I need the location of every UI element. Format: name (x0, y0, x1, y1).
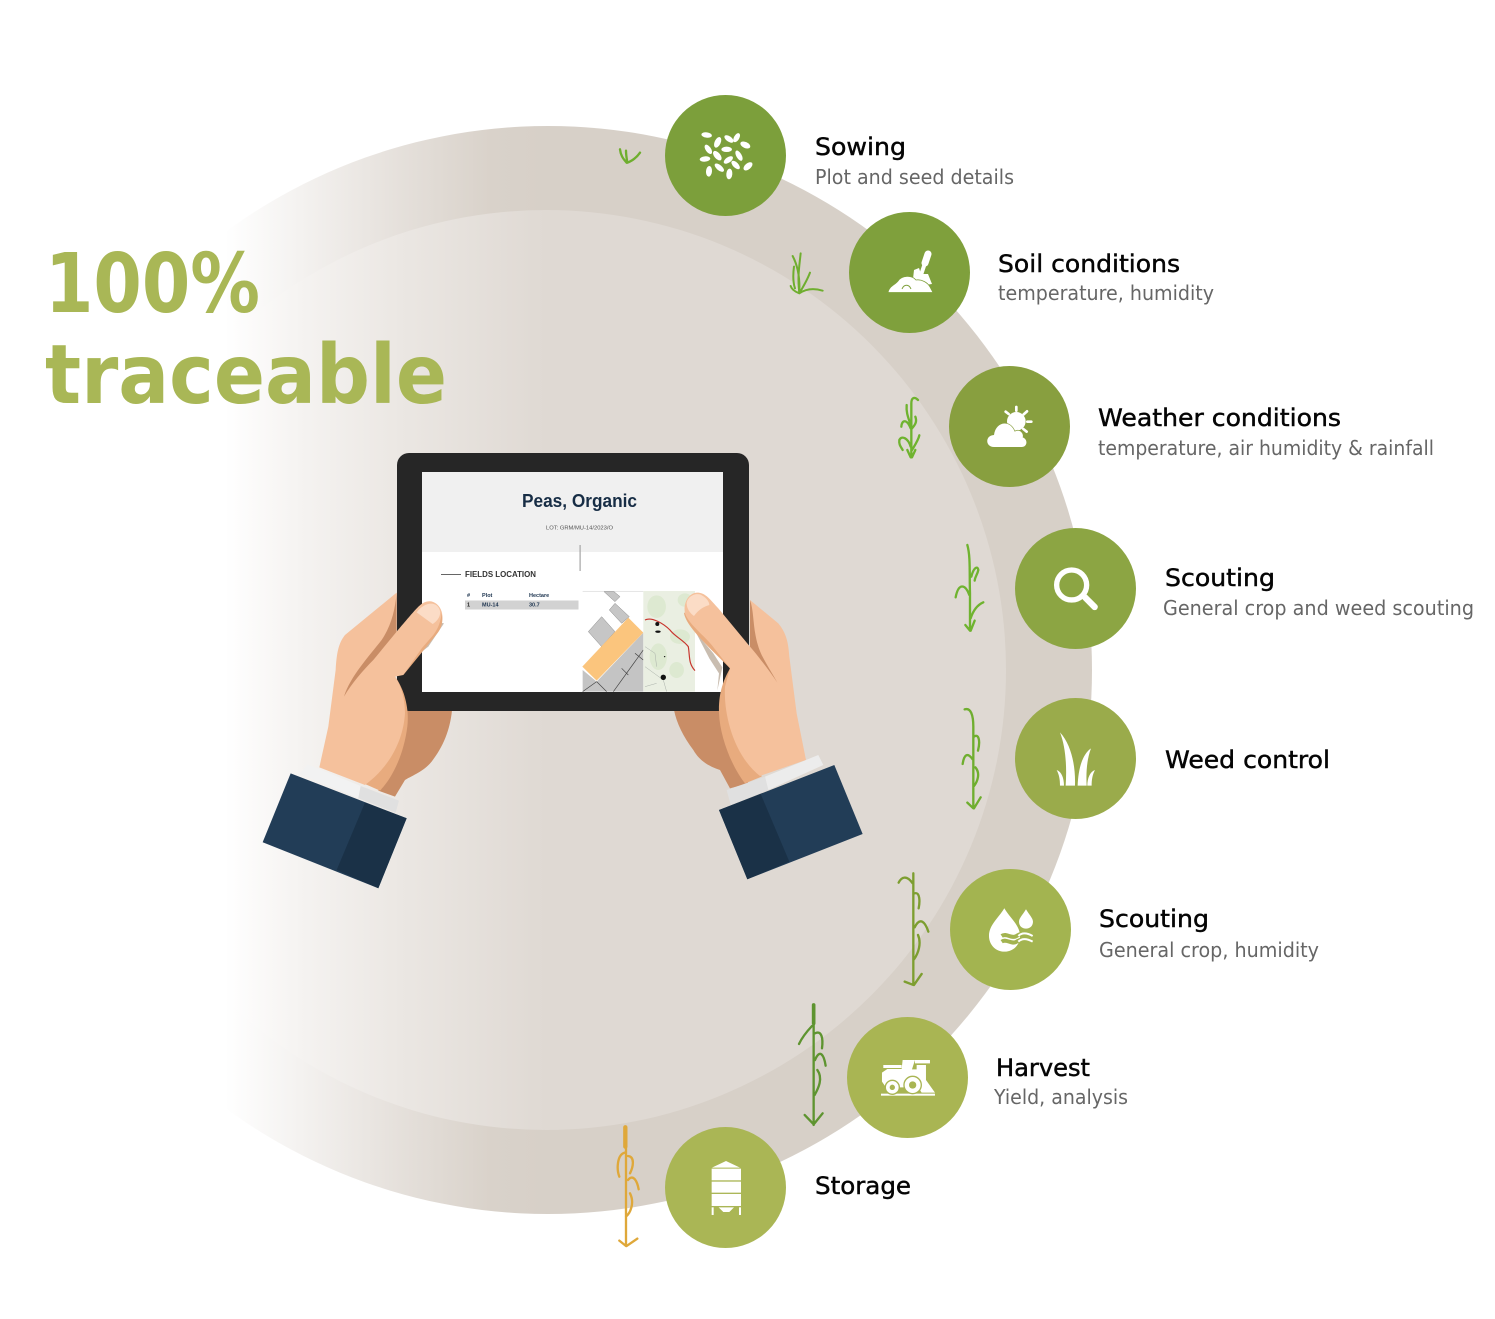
step: weed control (1015, 698, 1330, 819)
tablet (397, 453, 749, 711)
icon: water drops (950, 869, 1071, 990)
plant stage 1: sprout (620, 149, 640, 163)
left cuff and sleeve (263, 764, 407, 888)
plot table: 30.7 (529, 602, 540, 608)
right hand back, behind the tablet (674, 708, 748, 788)
step: soil conditions: Soil conditions (998, 250, 1180, 278)
step: harvest: Yield, analysis (993, 1085, 1128, 1109)
step: weather conditions (949, 366, 1434, 487)
step: sowing: Sowing (815, 133, 906, 161)
plot table: # (467, 593, 470, 599)
icon: sun and cloud (949, 366, 1070, 487)
step: irrigation scouting: Scouting (1099, 905, 1209, 933)
title: 100% traceable: traceable (45, 328, 447, 423)
step: storage (665, 1127, 911, 1248)
step: weed control: Weed control (1165, 746, 1330, 774)
icon: trowel in soil (849, 212, 970, 333)
step: harvest: Harvest (996, 1054, 1090, 1082)
plot table: 1 (467, 602, 470, 608)
plot table (465, 593, 578, 610)
background circle: outer ring (4, 126, 1092, 1214)
screen header band (422, 472, 723, 552)
step: harvest (847, 1017, 1128, 1138)
step: weather conditions: Weather conditions (1098, 404, 1341, 432)
step: sowing (665, 95, 1014, 216)
step: scouting: General crop and weed scouting (1163, 596, 1474, 620)
plot table: Hectare (529, 593, 549, 599)
icon: magnifier (1015, 528, 1136, 649)
step: soil conditions: temperature, humidity (998, 281, 1214, 305)
title: 100% traceable: 100% (45, 237, 260, 332)
step: irrigation scouting: General crop, humidity (1099, 938, 1319, 962)
parcel map (582, 591, 695, 692)
icon: combine harvester (847, 1017, 968, 1138)
icon: silo (665, 1127, 786, 1248)
background circle: inner disc (86, 210, 1006, 1130)
plant stage 3: seedling (899, 398, 919, 457)
left hand (319, 593, 444, 791)
right cuff and sleeve (719, 755, 863, 879)
step: sowing: Plot and seed details (815, 165, 1014, 189)
title: 100% traceable (45, 237, 447, 423)
step: soil conditions (849, 212, 1214, 333)
plot table: MU-14 (482, 602, 499, 608)
plot table: Plot (482, 593, 493, 599)
icon: seeds (665, 95, 786, 216)
report title: Peas, Organic (522, 491, 637, 511)
plant stage 7: wheat with ear (799, 1005, 826, 1125)
header divider (580, 545, 581, 571)
plant stage 2: young shoot (791, 253, 823, 293)
step: weather conditions: temperature, air humidity & rainfall (1098, 436, 1434, 460)
tablet screen (422, 472, 723, 692)
lot number: LOT: GRM/MU-14/2023/O (546, 526, 614, 532)
plant stage 8: ripe wheat (618, 1127, 639, 1246)
step: irrigation scouting (950, 869, 1319, 990)
plant stage 5: taller stalk (963, 709, 981, 808)
plant stage 6: mature stalk (899, 873, 928, 985)
left hand back, behind the tablet (378, 708, 452, 797)
step: storage: Storage (815, 1172, 911, 1200)
section heading: fields location: FIELDS LOCATION (465, 570, 536, 579)
step: scouting: Scouting (1165, 564, 1275, 592)
step: scouting (1015, 528, 1474, 649)
illustration: hands holding tablet (263, 453, 863, 888)
right hand (684, 593, 806, 783)
plant stage 4: growing stalk (956, 545, 983, 631)
icon: weeds (1015, 698, 1136, 819)
